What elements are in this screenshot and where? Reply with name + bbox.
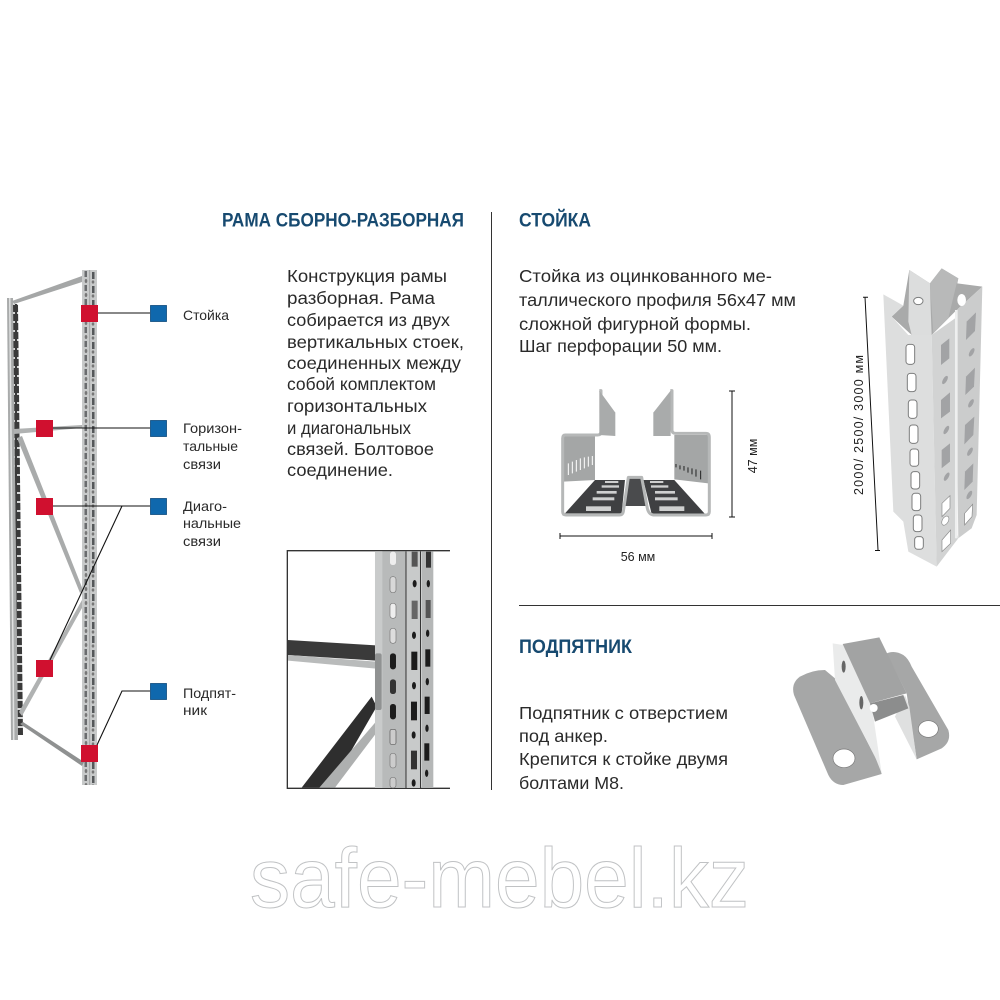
- upper diagonal brace: [17, 436, 83, 593]
- dimension: length: 2000/ 2500/ 3000 мм: [852, 355, 866, 495]
- detail photo: [287, 551, 450, 788]
- frame description: собирается из двух: [287, 310, 450, 330]
- heading: upright: СТОЙКА: [519, 210, 591, 232]
- upright description: таллического профиля 56х47 мм: [519, 290, 796, 310]
- red markers: [36, 305, 98, 762]
- frame description: соединенных между: [287, 353, 461, 373]
- horizontal divider: [519, 604, 1000, 606]
- dimension: length: [852, 297, 880, 550]
- frame labels: Диаго-: [183, 498, 227, 514]
- floor: [565, 477, 705, 514]
- bottom brace: [20, 722, 84, 766]
- cross-section drawing: [563, 391, 709, 515]
- dimension: 56 mm: 56 мм: [621, 550, 655, 564]
- post holes: [906, 297, 923, 549]
- frame description: вертикальных стоек,: [287, 332, 464, 352]
- right base plate: [887, 652, 949, 759]
- top channel: [843, 637, 908, 722]
- upright description: сложной фигурной формы.: [519, 314, 751, 334]
- vertical divider: [490, 212, 492, 790]
- foot plate description: болтами М8.: [519, 773, 624, 793]
- upright: [375, 551, 433, 788]
- frame labels: тальные: [183, 438, 238, 454]
- frame labels: Стойка: [183, 307, 229, 323]
- frame labels: связи: [183, 533, 221, 549]
- upright description: Стойка из оцинкованного ме-: [519, 266, 772, 286]
- upright description: [519, 266, 796, 356]
- heading: foot plate: ПОДПЯТНИК: [519, 637, 632, 658]
- dimension: 47 mm: [729, 391, 760, 517]
- right faces: [932, 318, 958, 567]
- watermark: safe-mebel.kz: [250, 831, 749, 925]
- foot plate description: Крепится к стойке двумя: [519, 749, 728, 769]
- left upright: [7, 298, 23, 740]
- side walls: [833, 643, 917, 773]
- inner walls: [563, 435, 708, 483]
- mounting holes: [833, 721, 938, 768]
- frame labels: ник: [183, 702, 208, 718]
- frame description: Конструкция рамы: [287, 266, 447, 286]
- post side holes: [941, 312, 976, 500]
- wall perforations: [568, 456, 592, 475]
- photo frame: [287, 551, 450, 788]
- frame description: связей. Болтовое: [287, 439, 434, 459]
- frame description: [287, 266, 464, 480]
- right upright: [82, 270, 97, 785]
- top brace: [12, 276, 82, 304]
- blue markers: [150, 306, 166, 700]
- horizontal brace: [14, 425, 82, 434]
- foot plate description: под анкер.: [519, 726, 608, 746]
- upright post drawing: [883, 268, 982, 567]
- frame description: соединение.: [287, 460, 393, 480]
- floor slots: [586, 481, 684, 511]
- upright description: Шаг перфорации 50 мм.: [519, 336, 722, 356]
- perforations: [390, 552, 431, 788]
- top inside: [892, 268, 982, 335]
- callout lines: [50, 313, 150, 745]
- left face: [883, 294, 937, 567]
- top cutout: [957, 294, 966, 306]
- foot plate drawing: [793, 637, 949, 785]
- foot plate description: [519, 703, 728, 793]
- frame illustration: [7, 270, 97, 785]
- foot plate description: Подпятник с отверстием: [519, 703, 728, 723]
- upper flanges: [599, 391, 671, 436]
- bolt holes: [842, 661, 878, 712]
- frame labels: Горизон-: [183, 420, 242, 436]
- lower diagonal brace: [19, 600, 82, 716]
- frame description: горизонтальных: [287, 396, 427, 416]
- frame labels: [183, 307, 242, 718]
- back flanges: [908, 270, 932, 335]
- frame description: разборная. Рама: [287, 288, 435, 308]
- heading: frame: РАМА СБОРНО-РАЗБОРНАЯ: [222, 210, 464, 232]
- frame labels: нальные: [183, 515, 241, 531]
- profile outline: [563, 391, 709, 515]
- dimension: 47 mm: 47 мм: [746, 439, 760, 473]
- diagonal bar: [302, 697, 377, 788]
- horizontal bar: [288, 640, 376, 669]
- frame description: и диагональных: [287, 418, 411, 438]
- left base plate: [793, 670, 882, 785]
- frame labels: связи: [183, 456, 221, 472]
- frame labels: Подпят-: [183, 685, 236, 701]
- dimension: 56 mm: [560, 533, 712, 564]
- frame description: собой комплектом: [287, 374, 436, 394]
